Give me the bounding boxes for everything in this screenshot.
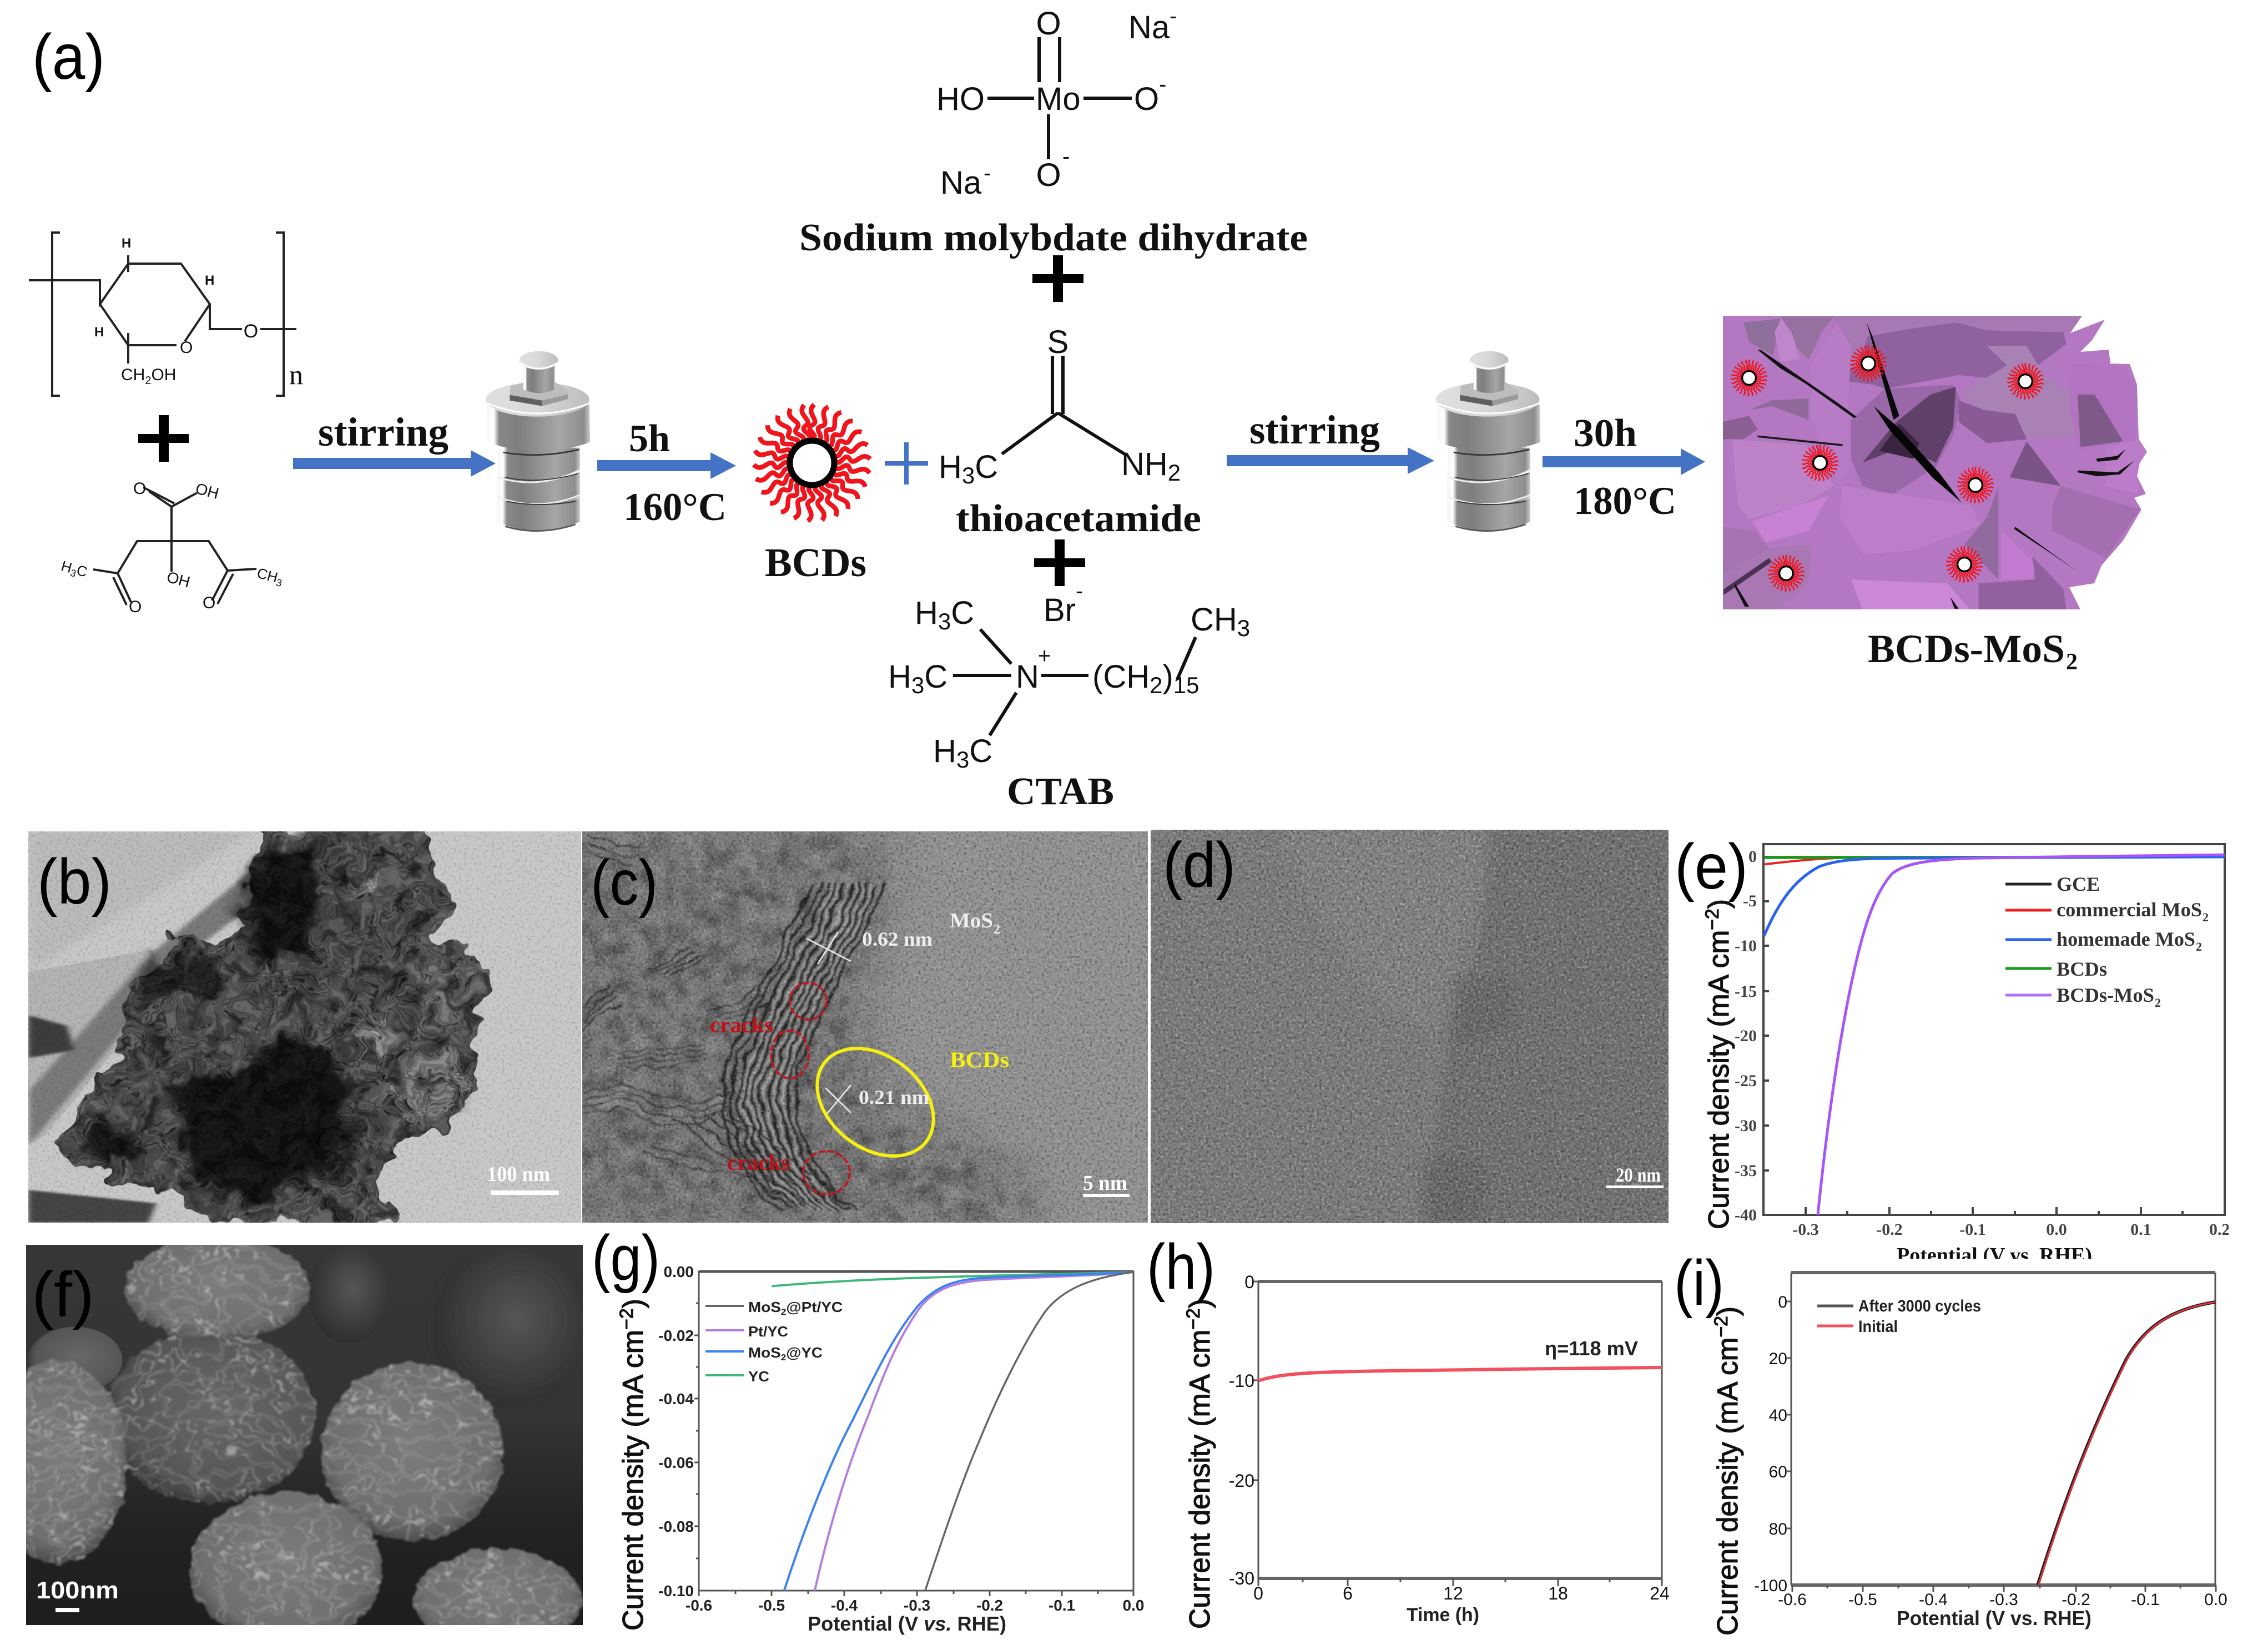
y tick labels e: 0 — [1748, 847, 1757, 866]
label c: (c) — [591, 847, 658, 919]
panel c: HRTEM image — [582, 831, 1148, 1223]
measure lines — [807, 932, 851, 1116]
annotation 0.62 nm: 0.62 nm — [862, 928, 933, 950]
molecule: citric acid: O — [133, 480, 146, 498]
y tick labels e: -5 — [1743, 892, 1757, 910]
molecule: CTAB: 3 — [956, 746, 969, 773]
y axis title i: ) — [1712, 1306, 1744, 1316]
molecule: sodium molybdate: O — [1036, 157, 1061, 193]
legend g: 2 — [781, 1308, 787, 1317]
x tick labels h: 18 — [1548, 1583, 1568, 1603]
blue plus — [885, 442, 928, 485]
small BCD particles — [1731, 345, 2044, 592]
legend e: homemade MoS — [2057, 928, 2195, 950]
molecule: CTAB: 15 — [1173, 672, 1199, 698]
yellow ellipse BCD — [796, 1026, 955, 1178]
text: stirring: stirring — [318, 410, 448, 455]
arrow: stirring — [293, 450, 496, 477]
panel i: cycling stability curve — [1711, 1273, 2227, 1636]
red dashed circle 3 — [803, 1151, 850, 1194]
legend g: MoS — [748, 1344, 779, 1361]
y axis title h: −2 — [1183, 1308, 1204, 1330]
molecule: thioacetamide: H — [939, 449, 962, 485]
text: BCDs: BCDs — [765, 540, 866, 585]
panel a: synthesis scheme — [29, 4, 2154, 813]
molecule: starch repeat unit: H — [94, 325, 104, 340]
text: BCDs-MoS2: BCDs-MoS — [1868, 627, 2065, 671]
legend i: After 3000 cycles — [1858, 1297, 1981, 1315]
arrow: stirring 2 — [1227, 447, 1434, 474]
x tick labels i: -0.1 — [2131, 1591, 2160, 1609]
molecule: CTAB: H — [888, 659, 911, 695]
molecule: CTAB: H — [915, 595, 938, 631]
text: 30h: 30h — [1574, 412, 1637, 455]
x axis title e: Potential (V vs. RHE) — [1897, 1244, 2092, 1267]
molecule: starch repeat unit: CH — [121, 366, 145, 384]
icon: autoclave 2 — [1436, 351, 1540, 531]
legend g: 2 — [781, 1353, 786, 1363]
molecule: CTAB: 3 — [1237, 615, 1250, 641]
legend e: 2 — [2155, 996, 2161, 1010]
molecule: CTAB: CH — [1191, 602, 1237, 638]
y tick labels h: -30 — [1229, 1568, 1254, 1588]
legend e — [2005, 873, 2209, 1010]
y axis title i: −2 — [1711, 1316, 1732, 1337]
y tick labels g: -0.06 — [658, 1454, 694, 1471]
annotation 0.21 nm: 0.21 nm — [859, 1086, 929, 1108]
molecule: starch repeat unit: 2 — [145, 375, 151, 387]
y tick labels g — [658, 1263, 694, 1599]
icon: BCD particle — [754, 405, 870, 521]
y tick labels e: -30 — [1735, 1117, 1757, 1135]
x tick labels e: -0.3 — [1792, 1220, 1819, 1239]
x tick labels g: -0.2 — [976, 1597, 1003, 1614]
y tick labels g: -0.04 — [658, 1390, 694, 1407]
y tick labels e: -10 — [1735, 937, 1757, 955]
legend g: MoS — [748, 1299, 779, 1315]
x tick labels h: 24 — [1650, 1583, 1670, 1603]
molecule: CTAB: ) — [1162, 659, 1173, 695]
panel f: SEM image — [0, 1237, 586, 1650]
molecule: sodium molybdate: - — [1159, 72, 1166, 97]
molecule: thioacetamide: 3 — [962, 462, 975, 488]
x tick labels i: -0.2 — [2062, 1591, 2090, 1609]
panel b: TEM image — [28, 827, 581, 1225]
x axis title h: Time (h) — [1407, 1604, 1479, 1626]
scale bar c: 5 nm — [1083, 1172, 1127, 1195]
legend e: 2 — [2203, 910, 2209, 924]
annotation eta: η=118 mV — [1545, 1337, 1638, 1360]
molecule: sodium molybdate — [936, 4, 1177, 201]
panel g: polarization curves — [616, 1263, 1144, 1635]
legend g: Pt/YC — [748, 1323, 788, 1340]
x tick labels e — [1792, 1220, 2230, 1239]
curves e — [1764, 855, 2225, 1215]
y tick labels h: 0 — [1244, 1272, 1254, 1292]
illustration: BCDs-MoS2 flower — [1721, 311, 2154, 613]
y axis title h: Current density (mA cm — [1184, 1328, 1216, 1629]
annotation cracks 2: cracks — [727, 1150, 790, 1175]
molecule: starch repeat unit: O — [180, 339, 193, 357]
text: CTAB: CTAB — [1007, 770, 1114, 813]
y tick labels i: 60 — [1769, 1463, 1787, 1481]
red dashed circle 2 — [771, 1031, 809, 1078]
text: 180C: 180°C — [1574, 480, 1676, 523]
molecule: sodium molybdate: Na — [1128, 9, 1170, 46]
x tick labels g: 0.0 — [1123, 1597, 1144, 1614]
x tick labels g: -0.1 — [1049, 1597, 1075, 1614]
molecule: CTAB: N — [1016, 659, 1039, 695]
x tick labels h: 0 — [1253, 1583, 1263, 1603]
molecule: CTAB: C — [924, 659, 947, 695]
y tick labels e: -40 — [1735, 1206, 1757, 1224]
molecule: thioacetamide: NH — [1121, 446, 1168, 482]
y tick labels e: -20 — [1735, 1027, 1757, 1045]
molecule: citric acid: OH — [194, 480, 221, 502]
molecule: citric acid: O — [203, 594, 215, 612]
molecule: CTAB: - — [1076, 579, 1083, 603]
molecule: citric acid — [59, 480, 285, 616]
molecule: starch repeat unit — [29, 233, 303, 396]
molecule: sodium molybdate: O — [1036, 6, 1061, 42]
panel d: TEM image — [1151, 830, 1669, 1223]
molecule: CTAB: C — [951, 595, 974, 631]
red dashed circle 1 — [790, 983, 826, 1020]
text: sodium molybdate dihydrate: Sodium molybdate dihydrate — [799, 216, 1308, 259]
molecule: starch repeat unit: n — [289, 359, 303, 390]
molecule: starch repeat unit: O — [244, 321, 258, 342]
curve h — [1258, 1368, 1662, 1381]
y tick labels i: 80 — [1769, 1520, 1787, 1538]
label h: (h) — [1147, 1232, 1215, 1303]
x tick labels e: 0.1 — [2130, 1220, 2151, 1239]
molecule: CTAB: C — [969, 733, 992, 769]
annotation BCDs: BCDs — [950, 1047, 1009, 1072]
molecule: thioacetamide: 2 — [1168, 460, 1181, 486]
x tick labels g: -0.3 — [904, 1597, 930, 1614]
y tick labels g: 0.00 — [664, 1263, 694, 1280]
scale bar b — [488, 1167, 559, 1195]
x tick labels i: -0.6 — [1778, 1591, 1807, 1609]
text: 5h: 5h — [629, 417, 670, 460]
y tick labels i: -100 — [1754, 1577, 1787, 1595]
legend e: BCDs — [2057, 958, 2107, 980]
x tick labels e: 0.0 — [2046, 1220, 2067, 1239]
molecule: thioacetamide: S — [1047, 324, 1069, 360]
curves g — [772, 1272, 1133, 1591]
x tick labels e: -0.2 — [1876, 1220, 1903, 1239]
label b: (b) — [37, 846, 112, 917]
legend e: BCDs-MoS — [2057, 984, 2154, 1006]
molecule: citric acid: 3 — [275, 577, 283, 589]
x tick labels i: -0.3 — [1989, 1591, 2018, 1609]
x tick labels i: 0.0 — [2204, 1591, 2227, 1609]
panel h: stability curve — [1183, 1272, 1670, 1629]
frame and ticks i — [1787, 1273, 2216, 1592]
y tick labels e: -35 — [1735, 1162, 1757, 1180]
annotation cracks 1: cracks — [710, 1012, 773, 1037]
y tick labels h — [1229, 1272, 1254, 1588]
frame and ticks g — [694, 1271, 1133, 1596]
y tick labels g: -0.08 — [658, 1518, 694, 1535]
y axis title e: Current density (mA cm — [1703, 928, 1735, 1229]
molecule: citric acid: C — [75, 562, 89, 581]
molecule: sodium molybdate: Mo — [1036, 81, 1081, 117]
y tick labels i: 40 — [1769, 1406, 1787, 1425]
legend e: commercial MoS — [2057, 899, 2202, 921]
x tick labels h: 6 — [1343, 1583, 1353, 1603]
label g: (g) — [592, 1223, 660, 1294]
x tick labels e: 0.2 — [2209, 1220, 2230, 1239]
legend e: 2 — [2196, 940, 2202, 953]
y tick labels e: -15 — [1735, 982, 1757, 1001]
text: BCDs-MoS2: 2 — [2066, 649, 2078, 675]
curve i — [2038, 1302, 2216, 1585]
y tick labels h: -10 — [1229, 1371, 1254, 1391]
y tick labels e: -25 — [1735, 1072, 1757, 1090]
label e: (e) — [1675, 831, 1748, 902]
legend i: Initial — [1858, 1318, 1898, 1336]
x axis title i: Potential (V vs. RHE) — [1897, 1607, 2091, 1629]
plus sign — [1034, 539, 1085, 586]
y axis title i: Current density (mA cm — [1712, 1334, 1744, 1636]
label d: (d) — [1163, 830, 1236, 901]
x tick labels g — [686, 1597, 1144, 1614]
y tick labels h: -20 — [1229, 1471, 1254, 1491]
molecule: sodium molybdate: Na — [940, 165, 982, 201]
y axis title g: ) — [617, 1299, 649, 1308]
x tick labels h — [1253, 1583, 1670, 1603]
legend g — [705, 1299, 843, 1385]
frame and ticks h — [1254, 1281, 1662, 1586]
y axis title g: Current density (mA cm — [617, 1329, 649, 1631]
x tick labels e: -0.1 — [1959, 1220, 1986, 1239]
molecule: citric acid: O — [129, 598, 142, 616]
y tick labels g: -0.10 — [658, 1582, 694, 1599]
scale bar f: 100nm — [36, 1577, 119, 1604]
x tick labels i: -0.4 — [1919, 1591, 1948, 1609]
arrow: 5h — [597, 452, 736, 479]
molecule: CTAB: 3 — [938, 608, 951, 634]
molecule: CTAB: (CH — [1092, 659, 1150, 695]
legend i — [1817, 1297, 1981, 1336]
molecule: CTAB: 3 — [911, 672, 924, 698]
y axis title e: ) — [1703, 899, 1735, 909]
icon: autoclave 1 — [486, 351, 590, 531]
molecule: starch repeat unit: H — [122, 236, 131, 251]
molecule: thioacetamide: C — [975, 449, 998, 485]
molecule: citric acid: 3 — [69, 567, 77, 579]
text: thioacetamide: thioacetamide — [956, 497, 1201, 540]
molecule: thioacetamide — [939, 324, 1181, 488]
molecule: starch repeat unit: H — [205, 273, 214, 288]
panel e: HER polarization curves — [1702, 844, 2230, 1267]
label a: (a) — [32, 22, 105, 93]
molecule: starch repeat unit: OH — [151, 366, 176, 384]
scale bar d: 20 nm — [1616, 1164, 1661, 1186]
molecule: CTAB: + — [1038, 644, 1051, 668]
frame and ticks e — [1763, 844, 2225, 1215]
y tick labels i: 20 — [1769, 1350, 1787, 1368]
y axis title e: −2 — [1702, 909, 1723, 930]
annotation MoS2: MoS — [950, 909, 993, 932]
molecule: CTAB: H — [933, 733, 956, 769]
legend e: GCE — [2057, 873, 2100, 895]
molecule: sodium molybdate: - — [1062, 144, 1070, 169]
y axis title h: ) — [1184, 1299, 1216, 1308]
annotation MoS2: 2 — [994, 922, 1000, 937]
x tick labels i: -0.5 — [1848, 1591, 1877, 1609]
y tick labels i: 0 — [1778, 1293, 1787, 1311]
x tick labels g: -0.6 — [686, 1597, 712, 1614]
molecule: citric acid: OH — [165, 568, 192, 591]
molecule: sodium molybdate: - — [984, 161, 991, 185]
y tick labels g: -0.02 — [658, 1327, 694, 1344]
arrow: 30h — [1543, 448, 1705, 475]
x tick labels h: 12 — [1443, 1583, 1463, 1603]
legend g: @YC — [786, 1344, 823, 1361]
plus sign — [1032, 255, 1083, 302]
molecule: CTAB: 2 — [1150, 672, 1162, 698]
molecule: sodium molybdate: - — [1170, 4, 1177, 28]
legend g: YC — [748, 1368, 769, 1385]
molecule: sodium molybdate: HO — [936, 81, 985, 117]
scale bar b: 100 nm — [487, 1163, 550, 1186]
x tick labels i — [1778, 1591, 2227, 1609]
plus sign — [138, 415, 189, 462]
molecule: citric acid: CH — [255, 564, 280, 586]
y tick labels e — [1735, 847, 1757, 1224]
y axis title g: −2 — [616, 1308, 637, 1330]
label f: (f) — [32, 1259, 94, 1330]
y tick labels i — [1754, 1293, 1787, 1595]
x axis title g: Potential (V vs. RHE) — [808, 1612, 1006, 1635]
label i: (i) — [1674, 1248, 1724, 1319]
molecule: citric acid: H — [59, 557, 74, 576]
molecule: CTAB: Br — [1044, 592, 1076, 628]
legend g: @Pt/YC — [786, 1299, 843, 1315]
x tick labels g: -0.4 — [831, 1597, 858, 1614]
molecule: sodium molybdate: O — [1134, 81, 1159, 117]
molecule: CTAB — [888, 579, 1250, 773]
x tick labels g: -0.5 — [758, 1597, 785, 1614]
text: stirring 2: stirring — [1249, 407, 1380, 452]
text: 160C: 160°C — [623, 486, 727, 529]
